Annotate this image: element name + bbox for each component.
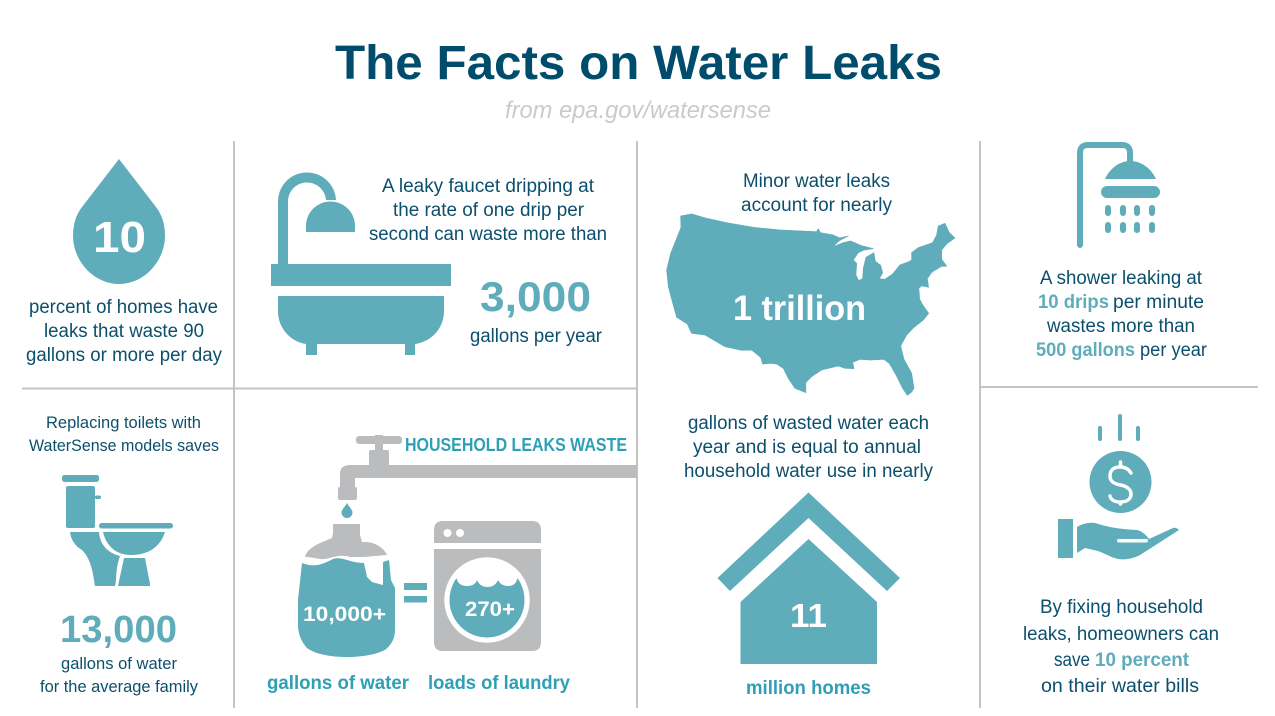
text block: the rate of one drip per [393, 200, 585, 221]
icon: washing machine [434, 521, 541, 651]
icon: coin over hand [1058, 414, 1179, 559]
washer number: 270+ [465, 598, 515, 621]
stat label [40, 654, 198, 696]
text block: leaks that waste 90 [44, 321, 204, 342]
map number: 1 trillion [733, 289, 866, 328]
icon: water drip [342, 503, 352, 518]
text block [29, 413, 219, 455]
map: United States [667, 214, 955, 395]
jug number: 10,000+ [303, 603, 386, 626]
icon: water jug [298, 524, 395, 657]
text block: 500 gallons [1036, 340, 1135, 361]
text block: equivalence: gallons of wasted water each [688, 413, 929, 434]
panel: ten percent of homes [26, 159, 222, 366]
text block: equivalence [684, 413, 933, 482]
text block: leaks, homeowners can [1023, 624, 1219, 645]
text block: percent of homes have [29, 297, 218, 318]
panel: saving money [1023, 414, 1219, 697]
heading: HOUSEHOLD LEAKS WASTE [405, 435, 627, 455]
text block: per year [1140, 340, 1208, 361]
panel: toilets [29, 413, 219, 696]
panel: one trillion gallons [667, 171, 955, 699]
panel: leaky faucet [271, 172, 607, 355]
icon: shower [1080, 145, 1160, 245]
stat label: gallons of water [61, 654, 177, 673]
text block [1023, 597, 1219, 697]
panel: shower leak [1036, 145, 1208, 361]
text block [369, 176, 607, 245]
text block: equivalence: household water use in nearly [684, 461, 933, 482]
icon: tap [338, 435, 637, 500]
drop number: 10 [93, 213, 146, 262]
text block: second can waste more than [369, 224, 607, 245]
label: gallons of water: gallons of water [267, 673, 410, 694]
stat label: for the average family [40, 677, 198, 696]
text block: By fixing household [1040, 597, 1203, 618]
stat: 3,000: 3,000 [480, 273, 591, 320]
text block: save [1054, 650, 1090, 671]
stat: 13,000: 13,000 [60, 609, 177, 651]
text block: A leaky faucet dripping at [382, 176, 595, 197]
text block: Replacing toilets with [46, 413, 201, 432]
icon: house [718, 492, 900, 664]
house number: 11 [790, 597, 827, 634]
text block: A shower leaking at [1040, 268, 1203, 289]
subtitle: from epa.gov/watersense [505, 97, 771, 124]
title: The Facts on Water Leaks [335, 37, 942, 90]
text block: WaterSense models saves [29, 436, 219, 455]
label: loads of laundry: loads of laundry [428, 673, 570, 694]
icon: bathtub [271, 172, 451, 355]
house label: million homes [746, 678, 871, 699]
text block [1036, 268, 1208, 361]
text block: gallons or more per day [26, 345, 222, 366]
text block: on their water bills [1041, 676, 1199, 697]
text block: 10 percent [1095, 650, 1190, 671]
text block: per minute [1113, 292, 1204, 313]
text block: intro: Minor water leaks [743, 171, 890, 192]
panel: household leaks [267, 435, 637, 694]
text block: 10 drips [1038, 292, 1109, 313]
text block: intro: account for nearly [741, 195, 892, 216]
text block: wastes more than [1046, 316, 1195, 337]
text block [26, 297, 222, 366]
icon: toilet [62, 475, 173, 586]
icon: water drop [73, 159, 165, 284]
stat label: gallons per year [470, 326, 603, 347]
text block: equivalence: year and is equal to annual [693, 437, 921, 458]
equals sign [404, 583, 427, 602]
text block: intro [741, 171, 892, 216]
